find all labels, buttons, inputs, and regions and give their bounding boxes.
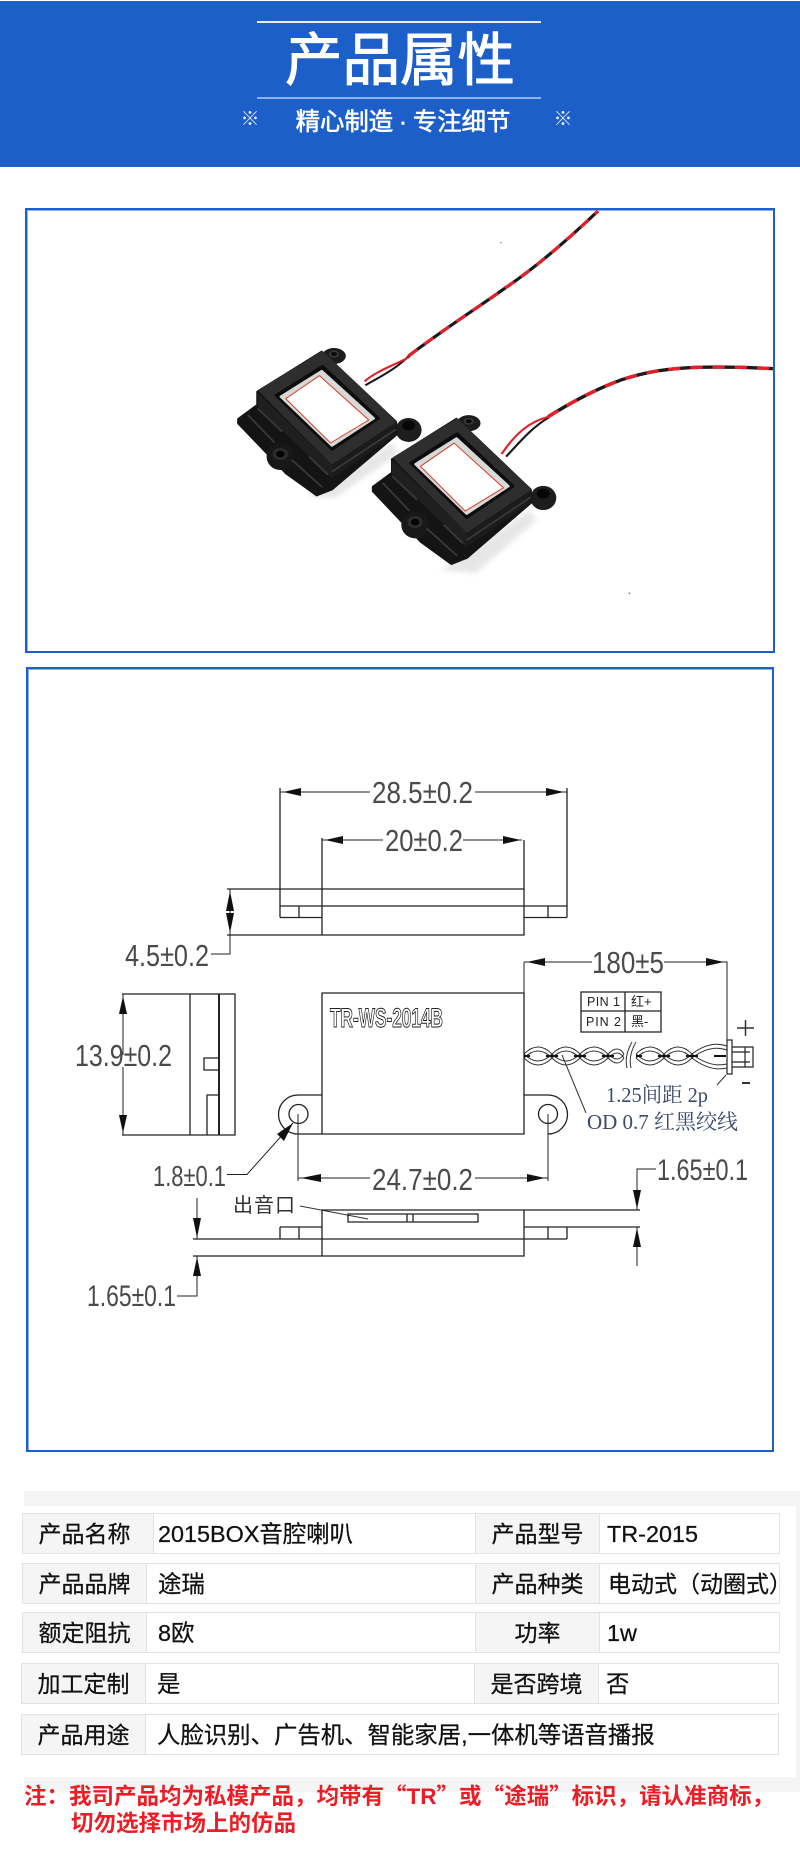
dimension 1.65 right: 1.65±0.1 [657, 1154, 748, 1187]
header lower rule [257, 97, 541, 99]
pin table: 红+ [631, 994, 652, 1009]
panel: product photo [25, 208, 775, 653]
model label: TR-WS-2014B [330, 1003, 443, 1033]
dimension 24.7: 24.7±0.2 [372, 1162, 473, 1197]
backing inner area [24, 1506, 796, 1777]
product photo: two speakers [237, 210, 773, 594]
connector callout: 1.25间距 2p [606, 1083, 708, 1107]
dimension 1.65 left [87, 1198, 201, 1313]
value: type: 电动式（动圈式） [608, 1571, 792, 1597]
label: model [475, 1514, 600, 1553]
wire callout: OD 0.7 红黑绞线 [587, 1110, 738, 1134]
dimension 4.5: 4.5±0.2 [125, 938, 209, 973]
faint backing band [24, 1491, 800, 1792]
speaker 2 [373, 415, 556, 564]
dimension 4.5 [125, 889, 234, 973]
value: product name: 2015BOX音腔喇叭 [158, 1521, 353, 1547]
spec row 5 [21, 1714, 779, 1755]
label: power: 功率 [514, 1620, 560, 1646]
front body with mounting ears [278, 993, 568, 1134]
dimension 20 [322, 823, 522, 858]
pin table: PIN 2 [586, 1015, 621, 1029]
label: type [475, 1564, 600, 1603]
speaker 1 [238, 348, 422, 495]
soft shadows [307, 443, 537, 573]
red notice: 注：我司产品均为私模产品，均带有“TR”或“途瑞”标识，请认准商标， [24, 1779, 774, 1811]
pin table [581, 992, 661, 1032]
side view [122, 994, 235, 1135]
wire 1 twisted pair [365, 211, 598, 385]
polarity marks [737, 1020, 754, 1084]
connector callout [606, 1075, 726, 1107]
value: brand: 途瑞 [158, 1571, 205, 1597]
bottom view [193, 1210, 640, 1256]
label: customization [22, 1664, 146, 1703]
spec row 2 [22, 1563, 780, 1604]
value: impedance: 8欧 [158, 1620, 194, 1646]
spec row 4 [21, 1663, 779, 1704]
dimension 28.5: 28.5±0.2 [372, 775, 473, 810]
spec row 1 [22, 1513, 780, 1554]
label: brand: 产品品牌 [38, 1571, 130, 1597]
label: impedance [23, 1613, 147, 1652]
connector [727, 1040, 753, 1074]
red notice: 切勿选择市场上的仿品 [71, 1811, 296, 1836]
sound outlet label [233, 1194, 368, 1219]
sound outlet label: 出音口 [233, 1194, 295, 1217]
value: cross-border: 否 [606, 1671, 629, 1697]
label: customization: 加工定制 [38, 1671, 130, 1697]
wire 2 twisted pair [502, 367, 773, 457]
label: type: 产品种类 [492, 1571, 584, 1597]
dimension 180 [524, 945, 727, 1040]
dimension 1.65 left: 1.65±0.1 [87, 1280, 176, 1313]
label: impedance: 额定阻抗 [38, 1620, 130, 1646]
value: power: 1w [607, 1620, 637, 1646]
title: 产品属性 [285, 29, 515, 93]
dimension 28.5 [280, 775, 567, 810]
dimension 1.65 right [633, 1154, 748, 1266]
label: application: 产品用途 [38, 1722, 130, 1748]
label: cross-border: 是否跨境 [490, 1671, 582, 1697]
subtitle: 精心制造 · 专注细节 [296, 109, 510, 136]
label: product name: 产品名称 [38, 1521, 130, 1547]
panel: dimension drawing [26, 667, 774, 1452]
left ornament: ※ [240, 109, 260, 130]
label: model: 产品型号 [492, 1521, 584, 1547]
label: cross-border [474, 1664, 599, 1703]
dimension 20: 20±0.2 [385, 823, 463, 858]
dimension 1.8: 1.8±0.1 [153, 1161, 226, 1193]
label: product name [23, 1514, 154, 1553]
right ornament: ※ [553, 109, 572, 130]
header banner [0, 1, 800, 167]
red notice [24, 1779, 774, 1836]
dimension 24.7 [298, 1114, 548, 1197]
dimension 1.8 [153, 1123, 293, 1193]
spec row 3 [22, 1612, 780, 1653]
pin table: PIN 1 [587, 995, 620, 1009]
front top view outline [227, 788, 567, 935]
value: model: TR-2015 [607, 1521, 698, 1547]
header top rule [257, 21, 541, 22]
dimension 13.9 [75, 994, 172, 1135]
value: customization: 是 [157, 1671, 180, 1697]
pin table: 黑- [631, 1014, 648, 1029]
dust specks [500, 242, 630, 594]
label: brand [23, 1564, 147, 1603]
value: application: 人脸识别、广告机、智能家居,一体机等语音播报 [157, 1722, 655, 1748]
label: power [475, 1613, 600, 1652]
twisted wire [524, 1042, 727, 1069]
label: application [22, 1715, 146, 1754]
dimension 180: 180±5 [592, 945, 664, 980]
wire callout [562, 1055, 738, 1134]
dimension 13.9: 13.9±0.2 [75, 1038, 172, 1073]
dimension drawing [75, 775, 754, 1313]
